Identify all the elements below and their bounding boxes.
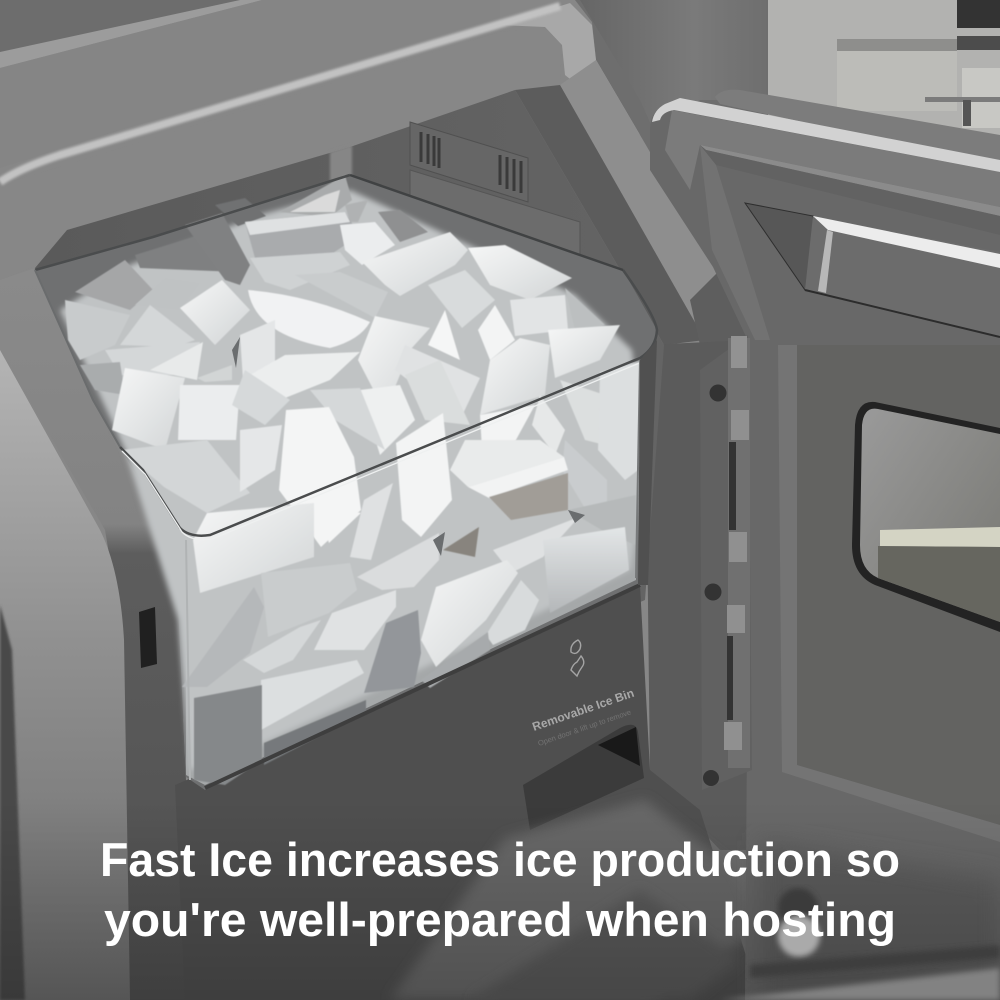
door hinges: [700, 335, 752, 790]
dark gaps between cubes: [232, 337, 585, 556]
lower drawer panel: [175, 585, 760, 1000]
left cabinet pillar: [0, 268, 195, 1000]
door foot ball: [778, 888, 820, 957]
interior vents: [410, 122, 580, 262]
caption: you're well-prepared when hosting: [104, 893, 896, 946]
icon: ice cubes: [571, 640, 584, 676]
bin body: [35, 175, 657, 790]
floor trim: [720, 945, 1000, 1000]
door face: [650, 105, 1000, 1000]
blurred shelf: [390, 800, 760, 1000]
door inner panel: [797, 345, 1000, 825]
caption: Fast Ice increases ice production so: [100, 833, 900, 886]
bottom shadow: [0, 800, 1000, 1000]
fridge frame, upper left: [0, 0, 750, 800]
caption: [100, 833, 900, 946]
ice cubes back row: [75, 175, 605, 348]
left cabinet side: [0, 350, 130, 1000]
ice cubes lower row: [121, 407, 636, 573]
bin label: Open door & lift up to remove: [537, 707, 632, 748]
door upper recess: [745, 203, 822, 293]
background appliance, top right: [768, 0, 1000, 140]
door window: [852, 402, 1000, 632]
frame highlight ridge: [0, 6, 560, 182]
door bottom blur: [760, 840, 1000, 1000]
ice cubes middle row: [65, 278, 648, 515]
compartment interior: [35, 90, 664, 790]
front ice through bin wall: [182, 503, 629, 785]
bin label: [530, 640, 636, 748]
open door: [650, 90, 1000, 1000]
frame pillar, right of compartment: [515, 60, 750, 850]
drawer cutout: [523, 725, 644, 830]
bin label: Removable Ice Bin: [530, 686, 636, 734]
ice bin: [35, 175, 657, 790]
ice mass base: [60, 190, 646, 770]
bin rim: [35, 175, 657, 788]
latch slot: [139, 607, 157, 668]
door gasket: [715, 90, 1000, 165]
